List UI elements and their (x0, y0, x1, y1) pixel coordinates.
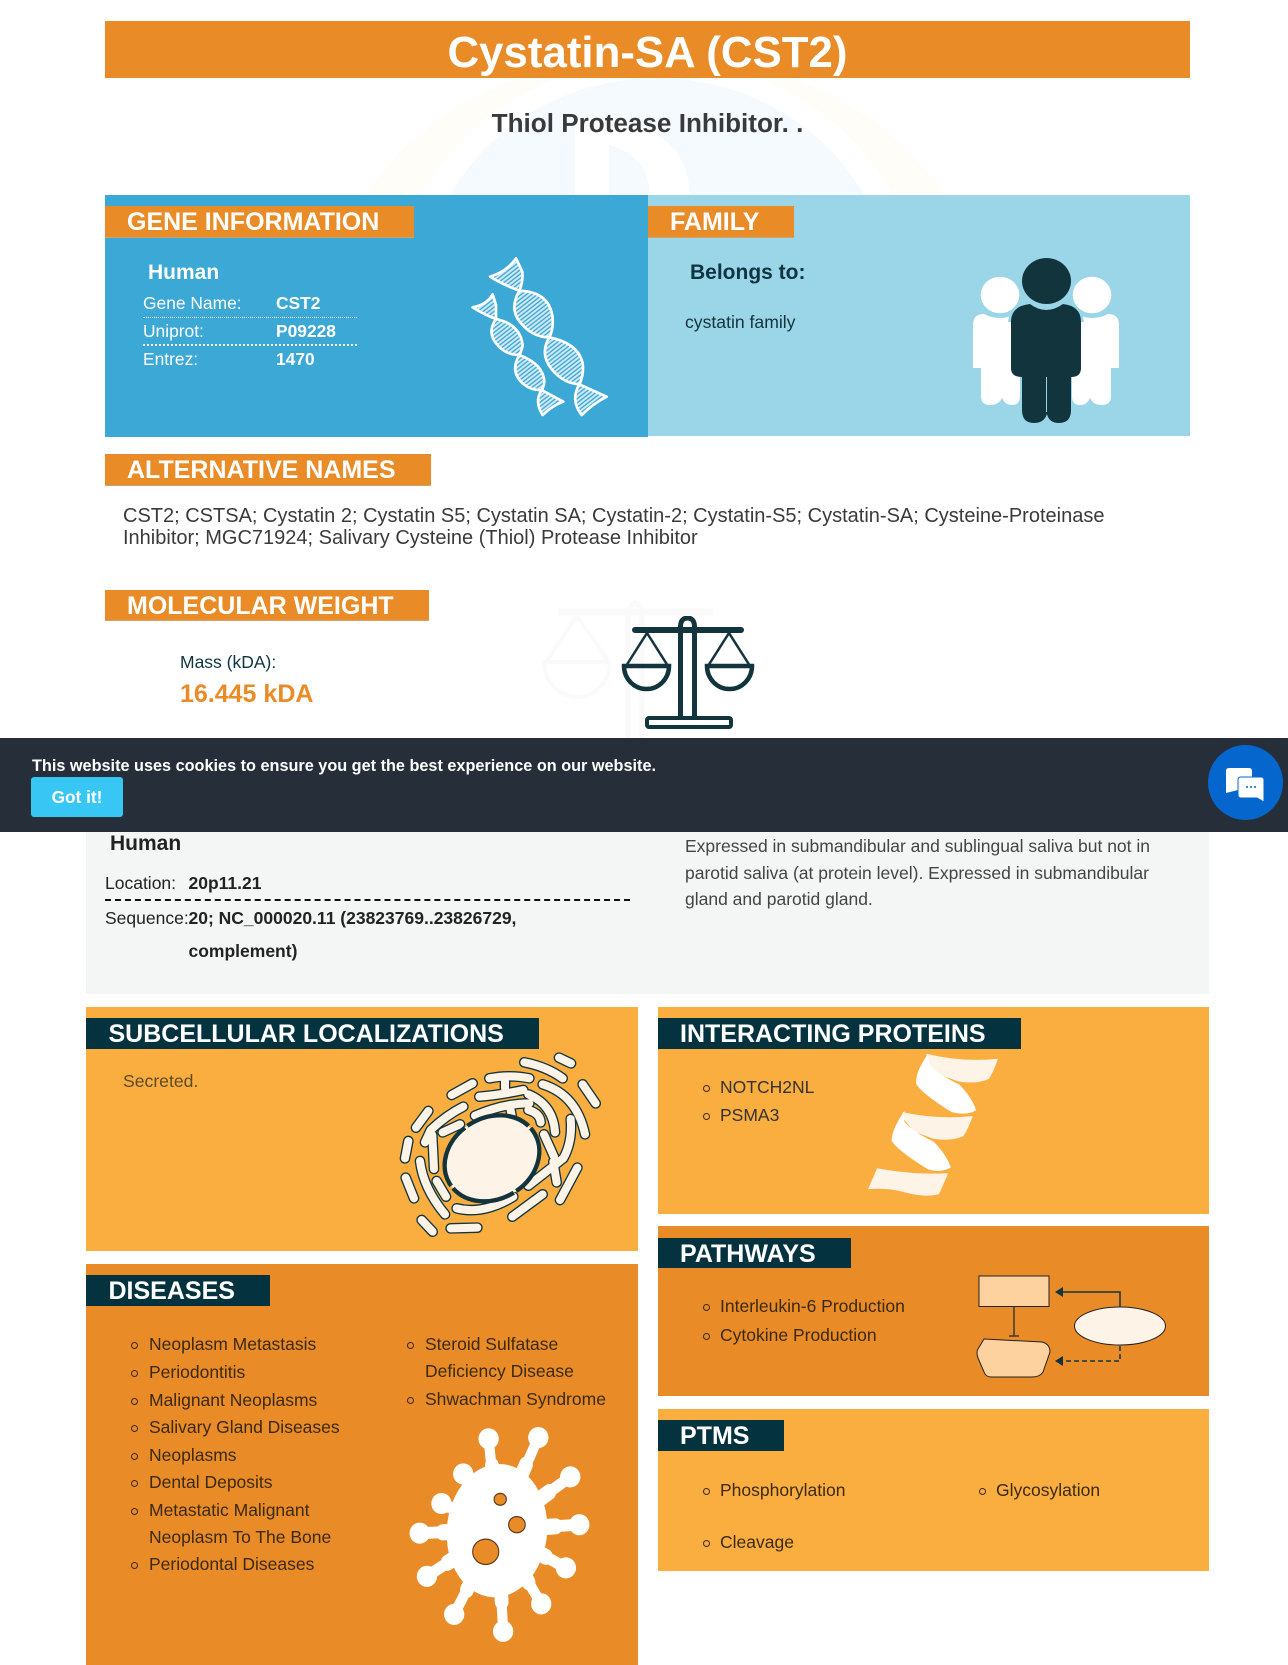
list item: phosphorylation: Phosphorylation (720, 1480, 846, 1500)
list: pathways (703, 1296, 905, 1345)
sequence continuation: complement) (188, 941, 297, 961)
heading: alternative names: ALTERNATIVE NAMES (127, 456, 396, 484)
heading: ptms (658, 1420, 784, 1451)
heading: diseases: DISEASES (108, 1277, 235, 1305)
sequence row: 20; NC_000020.11 (23823769..23826729, (188, 908, 516, 928)
list item: NOTCH2NL (720, 1077, 814, 1097)
heading: molecular weight: MOLECULAR WEIGHT (127, 592, 394, 620)
list: diseases column 1 (131, 1334, 340, 1574)
list: proteins (703, 1077, 814, 1125)
panel: subcellular localizations (86, 1007, 638, 1251)
species label: Human (148, 261, 219, 284)
list item: Neoplasm Metastasis (149, 1334, 316, 1354)
title: Cystatin-SA (CST2) (448, 28, 847, 77)
panel: gene information (105, 195, 648, 437)
heading: family: FAMILY (670, 208, 759, 236)
list item: Deficiency Disease (425, 1361, 574, 1381)
cookie message: This website uses cookies to ensure you get the best experience on our website. (32, 757, 656, 775)
title (105, 21, 1190, 78)
panel: ptms (658, 1409, 1209, 1571)
uniprot row (143, 321, 336, 341)
list item: Dental Deposits (149, 1472, 273, 1492)
heading: pathways (658, 1238, 851, 1268)
location row (105, 872, 261, 892)
gene name row (143, 293, 320, 313)
alternative names text: CST2; CSTSA; Cystatin 2; Cystatin S5; Cystatin SA; Cystatin-2; Cystatin-S5; Cystatin-SA; Cysteine-Proteinase (123, 505, 1104, 527)
belongs to label: Belongs to: (690, 261, 806, 284)
list item: Interleukin-6 Production (720, 1296, 905, 1316)
icon: chat bubble button (1208, 745, 1283, 820)
list item: glycosylation: Glycosylation (996, 1480, 1100, 1500)
pathway diagram (976, 1276, 1166, 1378)
heading: interacting proteins: INTERACTING PROTEINS (680, 1020, 986, 1048)
species label: Human (110, 832, 181, 855)
sequence row: Sequence: (105, 908, 189, 928)
heading: gene information: GENE INFORMATION (127, 208, 379, 236)
list item: Metastatic Malignant (149, 1500, 310, 1520)
button: got it (31, 777, 123, 817)
entrez row (143, 349, 315, 369)
list item: Periodontitis (149, 1362, 245, 1382)
heading: family (648, 206, 794, 237)
list item: Salivary Gland Diseases (149, 1417, 340, 1437)
panel: diseases (86, 1264, 638, 1665)
list item: Shwachman Syndrome (425, 1389, 606, 1409)
list item: cleavage: Cleavage (720, 1532, 794, 1552)
heading: subcellular localizations: SUBCELLULAR LOCALIZATIONS (108, 1020, 504, 1048)
icon: people (973, 258, 1119, 423)
localization text: Secreted. (123, 1071, 198, 1091)
gene name row: Gene Name: (143, 293, 242, 313)
uniprot row: P09228 (276, 321, 336, 341)
icon: balance (622, 616, 754, 729)
tissue specificity text: Expressed in submandibular and sublingual saliva but not in (685, 836, 1150, 856)
list item: Periodontal Diseases (149, 1554, 314, 1574)
list item: PSMA3 (720, 1105, 779, 1125)
location row: Location: (105, 872, 176, 892)
alternative names text (123, 505, 1104, 549)
list item: Cytokine Production (720, 1325, 877, 1345)
heading: pathways: PATHWAYS (680, 1240, 816, 1268)
watermark logo (450, 78, 864, 195)
mass label: Mass (kDA): (180, 652, 276, 672)
heading: diseases (86, 1275, 270, 1306)
uniprot row: Uniprot: (143, 321, 204, 341)
list: diseases column 2 (407, 1334, 606, 1409)
icon: faint balance watermark (540, 590, 720, 740)
tissue specificity text: parotid saliva (at protein level). Expressed in submandibular (685, 862, 1149, 882)
list item: Neoplasms (149, 1444, 237, 1464)
tissue specificity text: gland and parotid gland. (685, 889, 873, 909)
cookie banner (0, 738, 1288, 832)
panel: pathways (658, 1226, 1209, 1396)
heading: ptms: PTMS (680, 1422, 749, 1450)
mass value: 16.445 kDA (180, 680, 313, 708)
entrez row: Entrez: (143, 349, 198, 369)
alternative names text: Inhibitor; MGC71924; Salivary Cysteine (Thiol) Protease Inhibitor (123, 527, 698, 549)
location row: 20p11.21 (188, 872, 261, 892)
icon: organelle (400, 1052, 601, 1237)
button: got it: Got it! (52, 787, 102, 807)
subtitle: Thiol Protease Inhibitor. . (492, 108, 803, 138)
entrez row: 1470 (276, 349, 315, 369)
list item (131, 1497, 331, 1551)
gene name row: CST2 (276, 293, 320, 313)
panel: chromosomal location and tissue specificity (86, 800, 1209, 994)
list item: Steroid Sulfatase (425, 1334, 558, 1354)
panel: family (648, 195, 1190, 436)
icon: dna (471, 256, 608, 416)
list item: Malignant Neoplasms (149, 1390, 317, 1410)
icon: protein ribbon (868, 1054, 998, 1196)
tissue specificity text (685, 836, 1150, 909)
icon: virus (410, 1427, 590, 1642)
family name: cystatin family (685, 312, 795, 332)
list item (407, 1331, 574, 1385)
panel: interacting proteins (658, 1007, 1209, 1214)
list item: Neoplasm To The Bone (149, 1527, 331, 1547)
